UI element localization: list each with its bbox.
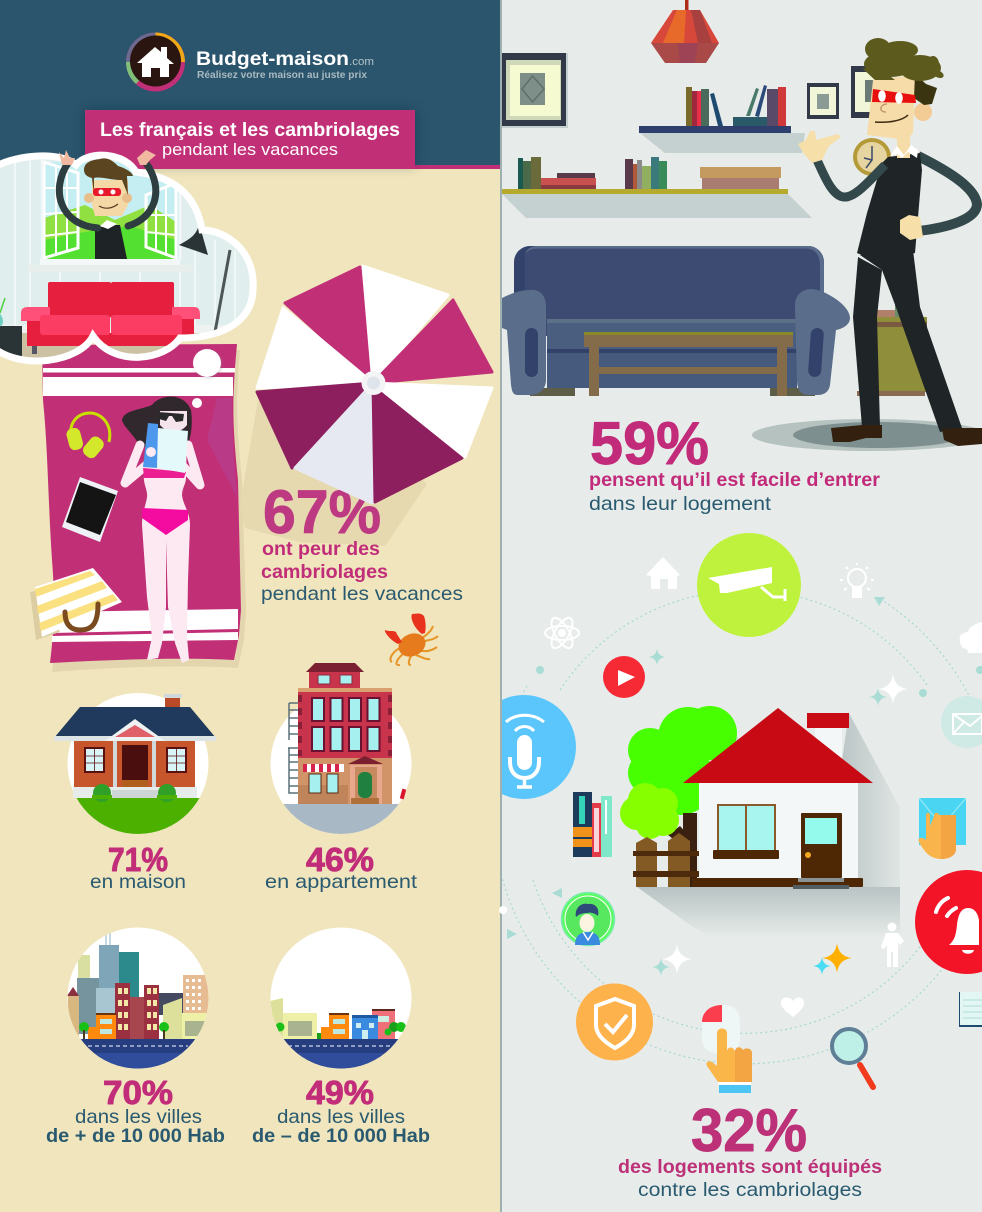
walls <box>699 783 858 880</box>
text: 49% villes de moins de 10 000 Hab: dans les villes <box>277 1106 405 1128</box>
icon: bell circle <box>915 870 982 974</box>
long house shadows <box>637 713 900 938</box>
sofa right arm <box>795 289 850 395</box>
torso <box>857 153 922 262</box>
burglar <box>798 38 982 446</box>
text: 32% statistic: contre les cambriolages <box>638 1179 862 1201</box>
lower shelf shadow <box>502 194 812 218</box>
roof <box>683 708 873 783</box>
trunk <box>683 813 697 887</box>
icon: open book <box>959 992 982 1027</box>
icon: play <box>603 656 645 698</box>
woman sunbathing <box>122 397 200 663</box>
floor shadow <box>752 419 982 451</box>
text: 67% statistic: 67% <box>263 478 381 546</box>
face <box>160 411 187 432</box>
brick wall <box>74 741 195 787</box>
icon: standing person <box>881 922 904 967</box>
house circle <box>54 693 216 836</box>
windows <box>84 747 105 773</box>
small tree <box>620 783 679 839</box>
chimney <box>815 727 842 767</box>
head <box>867 75 915 140</box>
burglar head <box>92 180 128 216</box>
chimney <box>165 698 180 708</box>
icon: beach bag <box>30 568 122 640</box>
roof <box>54 707 216 738</box>
text: 70% villes de plus de 10 000 Hab: 70% <box>103 1074 173 1111</box>
icon: tablet <box>62 477 118 542</box>
logo <box>126 32 374 92</box>
floor <box>22 333 201 358</box>
awning <box>303 764 344 772</box>
text: 70% villes de plus de 10 000 Hab: dans les villes <box>75 1106 202 1128</box>
icon: magnifier <box>832 1029 873 1087</box>
parasol shadow <box>240 400 427 546</box>
text: 71% en maison: 71% <box>108 841 168 878</box>
logo name: Budget-maison <box>196 49 349 70</box>
text: 49% villes de moins de 10 000 Hab <box>252 1074 430 1147</box>
burglar collar <box>100 220 117 229</box>
cabinet behind burglar <box>857 293 927 396</box>
hydrant <box>400 789 406 799</box>
big tree <box>628 706 737 815</box>
fence <box>636 837 657 887</box>
text: 46% en appartement <box>265 841 418 893</box>
title line 1: Les français et les cambriolages <box>100 119 400 141</box>
arrow: small triangles and dots <box>507 597 982 939</box>
upper shelf shadow <box>640 133 805 153</box>
icon: envelope with hand <box>919 798 966 859</box>
text: 59% statistic: dans leur logement <box>589 493 772 515</box>
left panel background <box>0 0 500 1212</box>
text: 59% statistic: 59% <box>590 410 709 477</box>
text: 67% statistic: cambriolages <box>261 561 388 583</box>
bikini bottom <box>142 508 188 535</box>
arms <box>125 445 200 485</box>
icon: microphone circle <box>502 695 576 799</box>
sparkles <box>648 648 908 976</box>
text: 59% statistic <box>589 410 880 515</box>
parasol <box>257 266 492 503</box>
thought cloud: burglar breaking in <box>0 150 270 373</box>
text: 46% en appartement: en appartement <box>265 871 418 893</box>
text: 70% villes de plus de 10 000 Hab: de + de 10 000 Hab <box>46 1125 225 1147</box>
pendant lamp <box>651 0 719 63</box>
upper shelf <box>639 126 791 133</box>
boxes on lower shelf <box>700 167 781 189</box>
hair <box>122 397 192 447</box>
text: 49% villes de moins de 10 000 Hab: de – de 10 000 Hab <box>252 1125 430 1147</box>
window <box>717 804 776 850</box>
big city circle <box>67 928 210 1071</box>
crab icon <box>385 614 438 665</box>
door <box>801 813 842 878</box>
panel divider <box>500 0 502 1212</box>
lower shelf <box>502 189 788 194</box>
small town circle <box>268 928 414 1071</box>
logo tagline: Réalisez votre maison au juste prix <box>197 70 367 81</box>
icon: headphones <box>65 413 110 461</box>
sofa left arm <box>502 290 546 395</box>
entrance <box>350 765 382 804</box>
text: 46% en appartement: 46% <box>306 841 374 878</box>
central house <box>620 706 873 889</box>
icon: heart <box>781 997 804 1017</box>
burglar arms raised <box>59 163 156 228</box>
neck and collar <box>897 134 910 158</box>
window <box>40 162 180 260</box>
books on upper shelf <box>686 85 786 126</box>
right panel background <box>500 0 982 1212</box>
book <box>143 423 158 468</box>
title line 2: pendant les vacances <box>162 140 338 159</box>
burglar hands <box>59 150 75 165</box>
text: 67% statistic: pendant les vacances <box>261 583 463 605</box>
shoes <box>831 425 882 442</box>
right arm on hip <box>918 156 977 231</box>
gable <box>105 719 165 741</box>
mask <box>872 89 916 103</box>
side table <box>0 326 22 356</box>
dotted orbit arcs <box>493 590 982 1064</box>
icon: speech cloud <box>960 622 982 653</box>
picture frame: large <box>502 53 568 128</box>
icon: mouse and hand <box>702 1005 752 1093</box>
burglar body <box>95 225 127 259</box>
beach towel <box>42 344 246 672</box>
text: 67% statistic: ont peur des <box>262 538 380 560</box>
picture frame: partly hidden <box>851 66 875 118</box>
legs <box>853 257 882 427</box>
icon: shield circle <box>576 984 653 1060</box>
text: 70% villes de plus de 10 000 Hab <box>46 1074 225 1147</box>
text: 32% statistic <box>618 1097 882 1201</box>
icon: books <box>573 792 612 857</box>
hair <box>862 38 945 105</box>
icon: atom <box>545 615 579 651</box>
hands <box>798 131 841 163</box>
icon: light bulb <box>840 563 874 597</box>
main building <box>298 688 392 758</box>
door <box>122 745 148 787</box>
text: 59% statistic: pensent qu’il est facile d’entrer <box>589 469 880 491</box>
coffee table <box>584 332 793 396</box>
header band <box>0 0 500 165</box>
icon: white dot at edge <box>499 906 507 914</box>
picture frame: small <box>807 83 839 119</box>
fire escape <box>288 703 298 793</box>
icon: envelope circle <box>941 696 982 748</box>
base <box>692 878 863 887</box>
bikini top <box>143 468 186 478</box>
window sill <box>30 265 31 272</box>
top floor <box>309 671 360 689</box>
body <box>142 445 190 663</box>
text: 71% en maison: en maison <box>90 871 186 893</box>
left arm raised <box>817 160 885 197</box>
terrace <box>73 787 197 798</box>
title banner <box>85 110 415 169</box>
logo domain: .com <box>349 56 374 68</box>
lamp <box>215 250 230 332</box>
hand <box>706 1028 752 1082</box>
icon: person avatar <box>562 892 614 946</box>
text: 32% statistic: 32% <box>691 1097 807 1164</box>
wall clock <box>853 138 891 176</box>
windows rows <box>312 698 380 751</box>
text: 71% en maison <box>90 841 186 893</box>
thought bubbles <box>192 349 222 408</box>
books on lower shelf <box>518 157 667 189</box>
red sofa <box>48 282 111 318</box>
text: 49% villes de moins de 10 000 Hab: 49% <box>306 1074 374 1111</box>
icon: small house <box>646 557 680 589</box>
text: 32% statistic: des logements sont équipés <box>618 1156 882 1178</box>
apartment circle <box>270 663 412 836</box>
text: 67% statistic <box>261 478 463 605</box>
nose and smile <box>881 104 887 112</box>
icon: camera circle <box>697 533 801 637</box>
blue sofa <box>502 246 850 396</box>
